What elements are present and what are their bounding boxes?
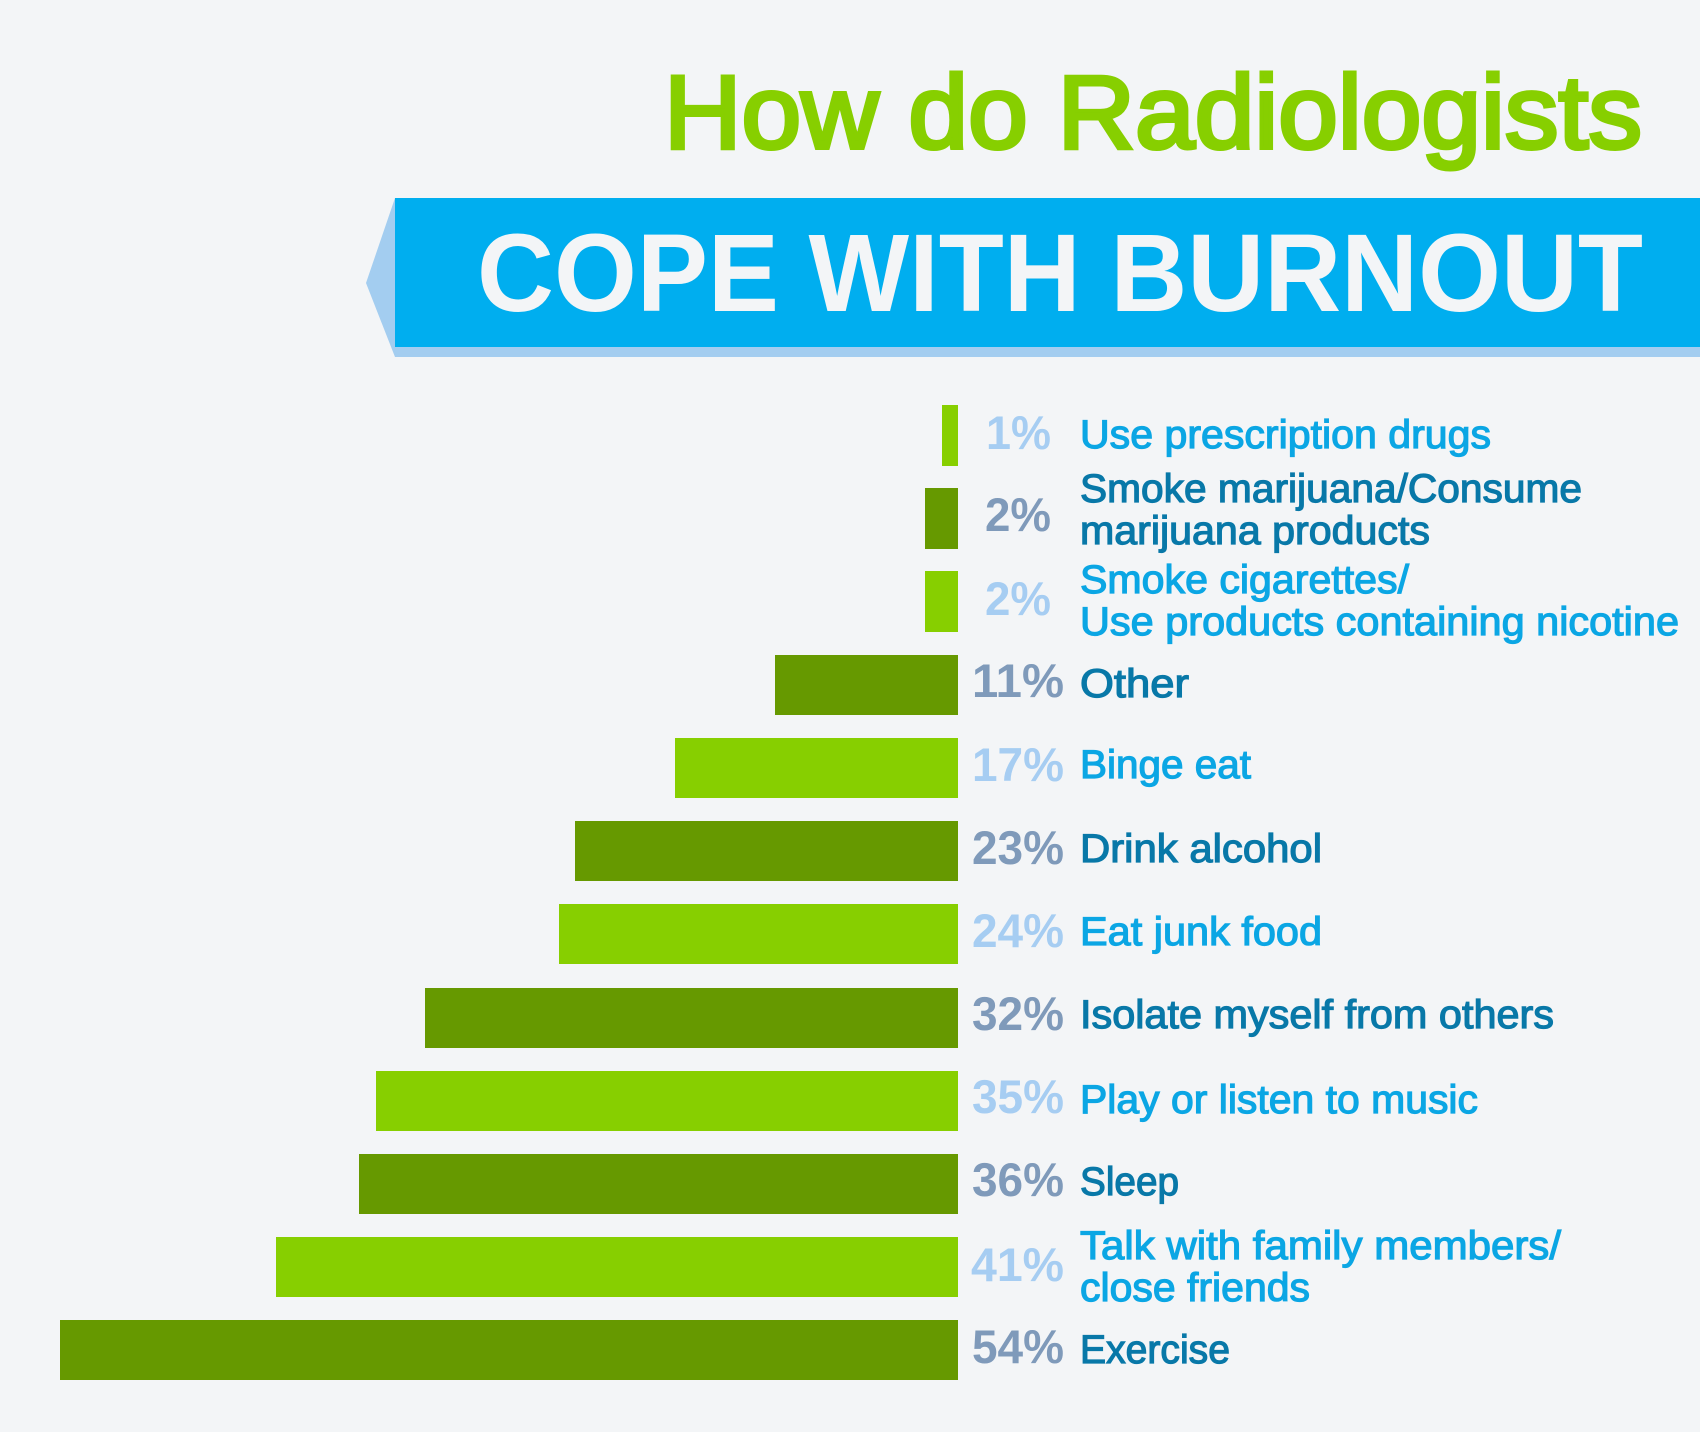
label: Other [1080,662,1189,706]
percentage: 11% [972,654,1064,707]
row: use prescription drugs 1% [942,405,1491,466]
row: smoke marijuana 2% [925,467,1582,553]
percentage: 2% [985,572,1051,625]
label: Eat junk food [1080,910,1322,954]
percentage: 41% [971,1238,1064,1291]
row: sleep 36% [359,1153,1179,1214]
row: talk with family 41% [276,1224,1561,1310]
bar [425,988,958,1048]
label: Talk with family members/ [1080,1224,1561,1268]
banner: cope with burnout [366,198,1700,357]
title: How do Radiologists [664,55,1642,171]
bar [575,821,958,881]
label: Play or listen to music [1080,1078,1478,1122]
label: marijuana products [1080,509,1430,553]
label: close friends [1080,1266,1310,1310]
percentage: 32% [972,987,1064,1040]
banner body [395,198,1700,347]
bar [276,1237,958,1297]
bar [359,1154,958,1214]
banner heading: COPE WITH BURNOUT [477,212,1643,335]
percentage: 36% [972,1153,1064,1206]
row: smoke cigarettes 2% [925,558,1679,644]
label [1080,1224,1561,1310]
row: drink alcohol 23% [575,821,1322,881]
label: Drink alcohol [1080,827,1322,871]
row: play or listen to music 35% [376,1070,1478,1131]
percentage: 35% [972,1070,1064,1123]
banner shadow and left tip [366,198,1700,357]
label [1080,558,1679,644]
row: isolate myself 32% [425,987,1554,1048]
percentage: 54% [972,1320,1064,1373]
label: Exercise [1080,1328,1230,1372]
bar [775,655,958,715]
bar [925,488,958,549]
percentage: 23% [972,821,1064,874]
label: Use products containing nicotine [1080,600,1679,644]
bar [675,738,958,798]
label: Use prescription drugs [1080,413,1491,457]
label: Isolate myself from others [1080,993,1554,1037]
bar chart: coping methods [60,405,1679,1380]
row: other 11% [775,654,1189,715]
bar [559,904,958,964]
bar [942,405,958,466]
percentage: 17% [972,738,1064,791]
bar [60,1320,958,1380]
percentage: 2% [985,488,1051,541]
row: exercise 54% [60,1320,1230,1380]
label: Binge eat [1080,743,1251,787]
row: eat junk food 24% [559,904,1322,964]
label [1080,467,1582,553]
row: binge eat 17% [675,738,1251,798]
percentage: 24% [972,904,1064,957]
percentage: 1% [986,406,1051,459]
label: Smoke marijuana/Consume [1080,467,1582,511]
bar [376,1071,958,1131]
label: Smoke cigarettes/ [1080,558,1409,602]
bar [925,571,958,632]
label: Sleep [1080,1160,1179,1204]
